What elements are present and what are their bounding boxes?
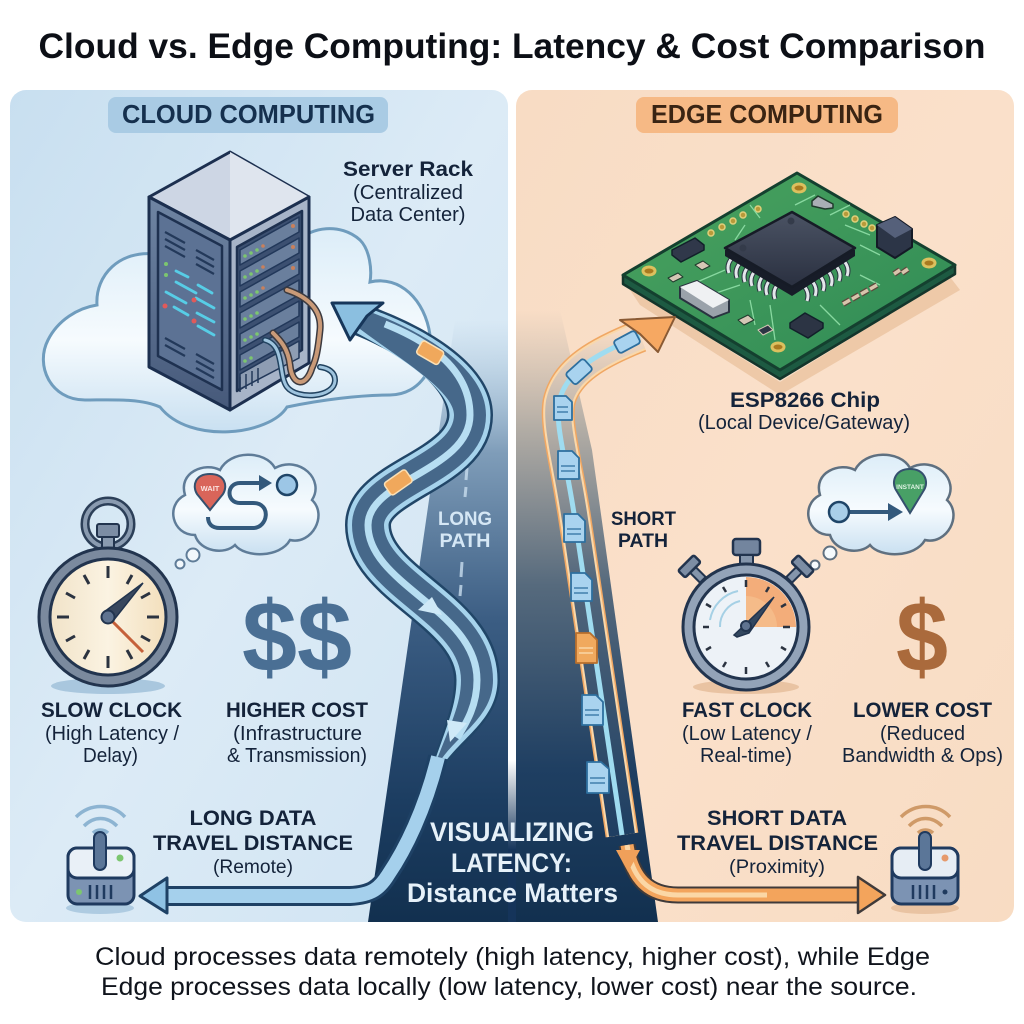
- road top section taper: light band: [353, 309, 490, 415]
- icon: slow clock: [39, 501, 177, 694]
- pad rows: [708, 206, 875, 236]
- short data travel distance label: [677, 807, 878, 878]
- server rack label: [343, 158, 473, 226]
- bottom caption: [95, 943, 930, 1001]
- lane surface: [558, 336, 640, 835]
- lane outer edges: [558, 336, 640, 835]
- route squiggle: [208, 483, 266, 528]
- higher cost label: [226, 699, 368, 767]
- data packet 1: [416, 340, 445, 365]
- road main asphalt: [368, 415, 477, 680]
- circuit traces: [690, 195, 880, 340]
- road lower taper: light band: [433, 680, 498, 768]
- long path label: [438, 509, 492, 552]
- orange elapsed wedge: [746, 577, 796, 627]
- slow clock label: SLOW CLOCK: [41, 699, 182, 722]
- road top section taper: asphalt: [356, 313, 486, 415]
- lower cost label: LOWER COST: [853, 699, 992, 722]
- thought cloud: winding path: [173, 455, 318, 568]
- server front blades: [240, 217, 299, 389]
- bottom caption: Edge processes data locally (low latency, lower cost) near the source.: [101, 973, 917, 1001]
- mounting holes: [643, 184, 935, 351]
- ESP8266 chip label: ESP8266 Chip: [730, 389, 880, 412]
- tail highlight: [165, 757, 438, 896]
- data packet 2: [383, 469, 413, 496]
- short path label: [611, 509, 676, 552]
- data packets and documents: [554, 330, 641, 793]
- small components: [672, 238, 704, 262]
- arrowhead into chip: [620, 317, 675, 352]
- ESP8266 chip label: [698, 389, 910, 434]
- centre callout: visualizing latency: [407, 817, 618, 908]
- short data travel distance label: SHORT DATA: [707, 807, 847, 830]
- short data travel distance label: TRAVEL DISTANCE: [677, 832, 878, 855]
- horizontal arrow body: [627, 845, 860, 895]
- higher cost label: HIGHER COST: [226, 699, 368, 722]
- road lower taper: outline: [430, 680, 500, 772]
- road top section taper: outline: [352, 306, 493, 415]
- lane inner highlights: [558, 336, 640, 835]
- slow clock label: [41, 699, 182, 767]
- green instant pin: [894, 469, 926, 513]
- centre callout: visualizing latency: Distance Matters: [407, 878, 618, 908]
- horizontal arrow outline: [627, 845, 860, 895]
- thought cloud: direct path: INSTANT: [896, 484, 924, 491]
- fast clock label: (Low Latency /: [682, 723, 812, 745]
- ESP8266 chip label: (Local Device/Gateway): [698, 412, 910, 434]
- server rack label: (Centralized: [353, 182, 463, 204]
- long data travel distance label: LONG DATA: [190, 807, 316, 830]
- higher cost label: & Transmission): [227, 745, 367, 767]
- road lane markings: [460, 468, 467, 596]
- icon: higher cost double dollar: $$: [242, 581, 352, 693]
- server rack label: Server Rack: [343, 158, 473, 181]
- fast clock label: Real-time): [700, 745, 792, 767]
- main IC: [725, 250, 855, 296]
- server rack label: Data Center): [350, 204, 466, 226]
- long data travel distance label: [153, 807, 353, 878]
- tail to router: [165, 757, 438, 896]
- clock ticks: [57, 566, 159, 668]
- central road: centre join: [508, 760, 516, 922]
- red wait pin: [195, 474, 225, 510]
- panel: cloud computing background: [10, 90, 508, 922]
- centre callout: visualizing latency: LATENCY:: [451, 848, 572, 878]
- direct route arrow: [848, 510, 890, 514]
- thought cloud: winding path: WAIT: [201, 484, 220, 493]
- icon: ESP8266 board: [623, 173, 960, 395]
- short path label: SHORT: [611, 509, 676, 530]
- bottom caption: Cloud processes data remotely (high latency, higher cost), while Edge: [95, 943, 930, 971]
- header: edge computing pill: EDGE COMPUTING: [651, 99, 883, 129]
- fast clock ticks: [703, 580, 790, 674]
- right side button: [781, 555, 814, 588]
- higher cost label: (Infrastructure: [233, 723, 362, 745]
- server status lights: [243, 248, 259, 363]
- icon: right router: [891, 806, 959, 914]
- short path label: PATH: [618, 531, 668, 552]
- lower cost label: (Reduced: [880, 723, 965, 745]
- header: cloud computing pill: CLOUD COMPUTING: [122, 99, 375, 129]
- long data travel distance label: TRAVEL DISTANCE: [153, 832, 353, 855]
- fast clock label: [682, 699, 812, 767]
- white connector: [680, 281, 729, 318]
- arrowhead into server: [332, 303, 383, 340]
- server side vents and lights: [165, 232, 258, 392]
- resistor row: [843, 269, 908, 304]
- icon: server rack: [149, 152, 335, 410]
- server cables: [265, 290, 335, 395]
- icon: large cloud behind server: [43, 229, 433, 432]
- left side button: [678, 555, 711, 588]
- long data travel distance label: (Remote): [213, 857, 293, 878]
- short data travel distance label: (Proximity): [729, 857, 825, 878]
- title: Cloud vs. Edge Computing: Latency & Cost Comparison: [38, 27, 986, 66]
- winding long data path with arrow: [140, 303, 500, 913]
- thought cloud: direct path: [808, 455, 953, 570]
- top crown: [733, 539, 760, 555]
- flow arrow 1: [418, 597, 442, 615]
- arrowhead into router: [858, 877, 885, 913]
- horizontal arrow highlight: [627, 845, 767, 895]
- long path label: LONG: [438, 509, 492, 530]
- road centre stripe: [368, 324, 477, 738]
- lower cost label: [842, 699, 1003, 767]
- fast clock label: FAST CLOCK: [682, 699, 812, 722]
- road main light band: [368, 415, 477, 680]
- arrowhead towards router: [140, 878, 167, 913]
- lane centre line: [558, 336, 640, 835]
- slow clock label: (High Latency /: [45, 723, 179, 745]
- central road: edge side: [516, 310, 658, 922]
- short straight data path with arrow: [554, 317, 885, 913]
- speed arcs: [710, 591, 740, 627]
- arrowhead down on path: [616, 850, 640, 872]
- fast clock hand: [734, 597, 774, 637]
- road lower taper: asphalt: [436, 680, 493, 763]
- main IC pins: [728, 258, 848, 301]
- icon: left router: [66, 806, 134, 914]
- icon: lower cost dollar: $: [896, 581, 948, 693]
- document text lines: [557, 407, 605, 783]
- black relay component: [877, 217, 912, 258]
- long path label: PATH: [440, 531, 490, 552]
- panel: edge computing background: [516, 90, 1014, 922]
- flow arrow 2: [447, 720, 467, 742]
- central road: cloud side: [368, 320, 508, 922]
- icon: fast clock: [678, 539, 814, 694]
- lower cost label: Bandwidth & Ops): [842, 745, 1003, 767]
- centre callout: visualizing latency: VISUALIZING: [430, 817, 594, 847]
- clock hands: [110, 619, 143, 652]
- road main outline: [368, 415, 477, 680]
- slow clock label: Delay): [83, 745, 138, 767]
